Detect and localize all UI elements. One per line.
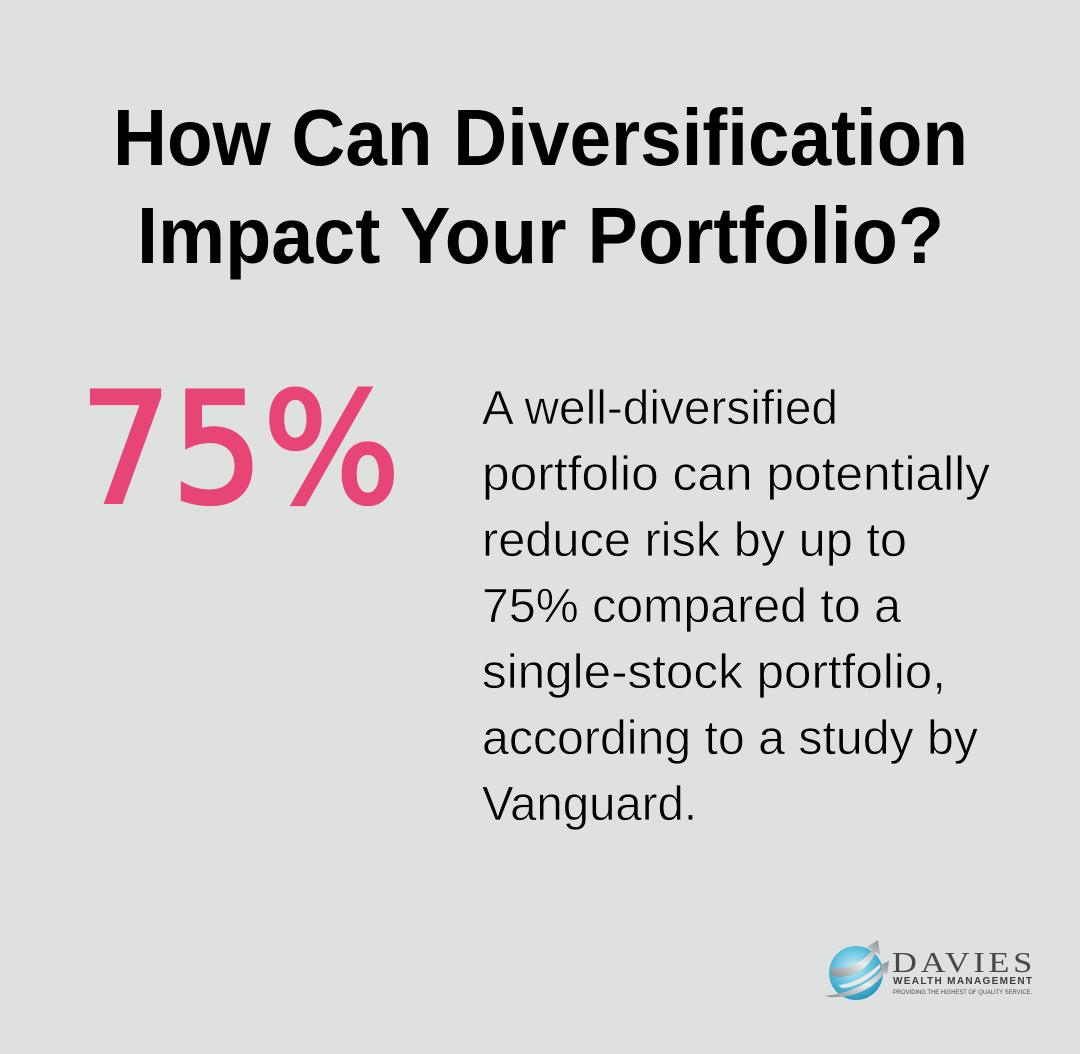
- title: How Can Diversification: [113, 93, 968, 182]
- big statistic: 75%: 75%: [80, 361, 400, 539]
- icon: globe with arrows: [825, 940, 889, 1000]
- description text block: Vanguard.: [482, 778, 697, 831]
- description text block: [482, 382, 990, 831]
- title: [113, 93, 968, 280]
- wordmark: WEALTH MANAGEMENT: WEALTH MANAGEMENT: [893, 976, 1032, 987]
- tagline: PROVIDING THE HIGHEST OF QUALITY SERVICE.: [893, 989, 1032, 996]
- description text block: reduce risk by up to: [482, 514, 907, 567]
- wordmark: DAVIES: DAVIES: [892, 948, 1036, 979]
- logo: Davies Wealth Management: [825, 940, 1036, 1000]
- description text block: A well-diversified: [482, 382, 838, 435]
- title: Impact Your Portfolio?: [137, 191, 944, 280]
- description text block: 75% compared to a: [482, 580, 901, 633]
- description text block: single-stock portfolio,: [482, 646, 946, 699]
- description text block: portfolio can potentially: [482, 448, 990, 501]
- description text block: according to a study by: [482, 712, 978, 765]
